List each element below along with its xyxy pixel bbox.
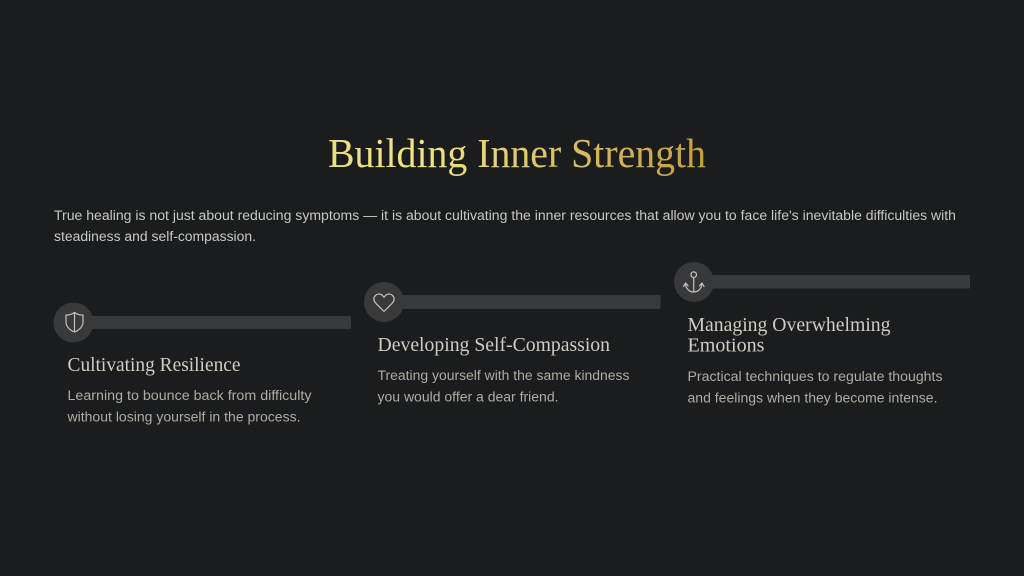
icon: heart (364, 282, 404, 322)
intro paragraph: True healing is not just about reducing symptoms — it is about cultivating the inner resources that allow you to face life's inevitable difficulties with (54, 208, 956, 223)
intro paragraph: steadiness and self-compassion. (54, 229, 256, 244)
progress bar (383, 295, 660, 309)
heading: Cultivating Resilience (68, 354, 240, 376)
description (688, 369, 943, 406)
heading: Managing Overwhelming (688, 314, 890, 336)
icon: shield (54, 302, 94, 342)
description: Learning to bounce back from difficulty (68, 388, 312, 403)
progress bar (73, 316, 351, 329)
heading: Emotions (688, 334, 765, 356)
panel: developing self-compassion (364, 282, 660, 404)
description: without losing yourself in the process. (66, 410, 300, 424)
description: and feelings when they become intense. (688, 390, 938, 406)
heading (688, 314, 890, 356)
description (378, 368, 630, 404)
panel: managing overwhelming emotions (674, 262, 970, 406)
description: Practical techniques to regulate thoughts (688, 369, 943, 384)
intro paragraph (54, 208, 956, 244)
progress bar (693, 275, 970, 288)
icon: anchor (674, 262, 714, 302)
panel: cultivating resilience (54, 302, 351, 424)
description: you would offer a dear friend. (378, 390, 558, 404)
description: Treating yourself with the same kindness (378, 368, 630, 383)
title: Building Inner Strength (328, 130, 706, 176)
description (66, 388, 312, 424)
heading: Developing Self-Compassion (378, 334, 610, 356)
